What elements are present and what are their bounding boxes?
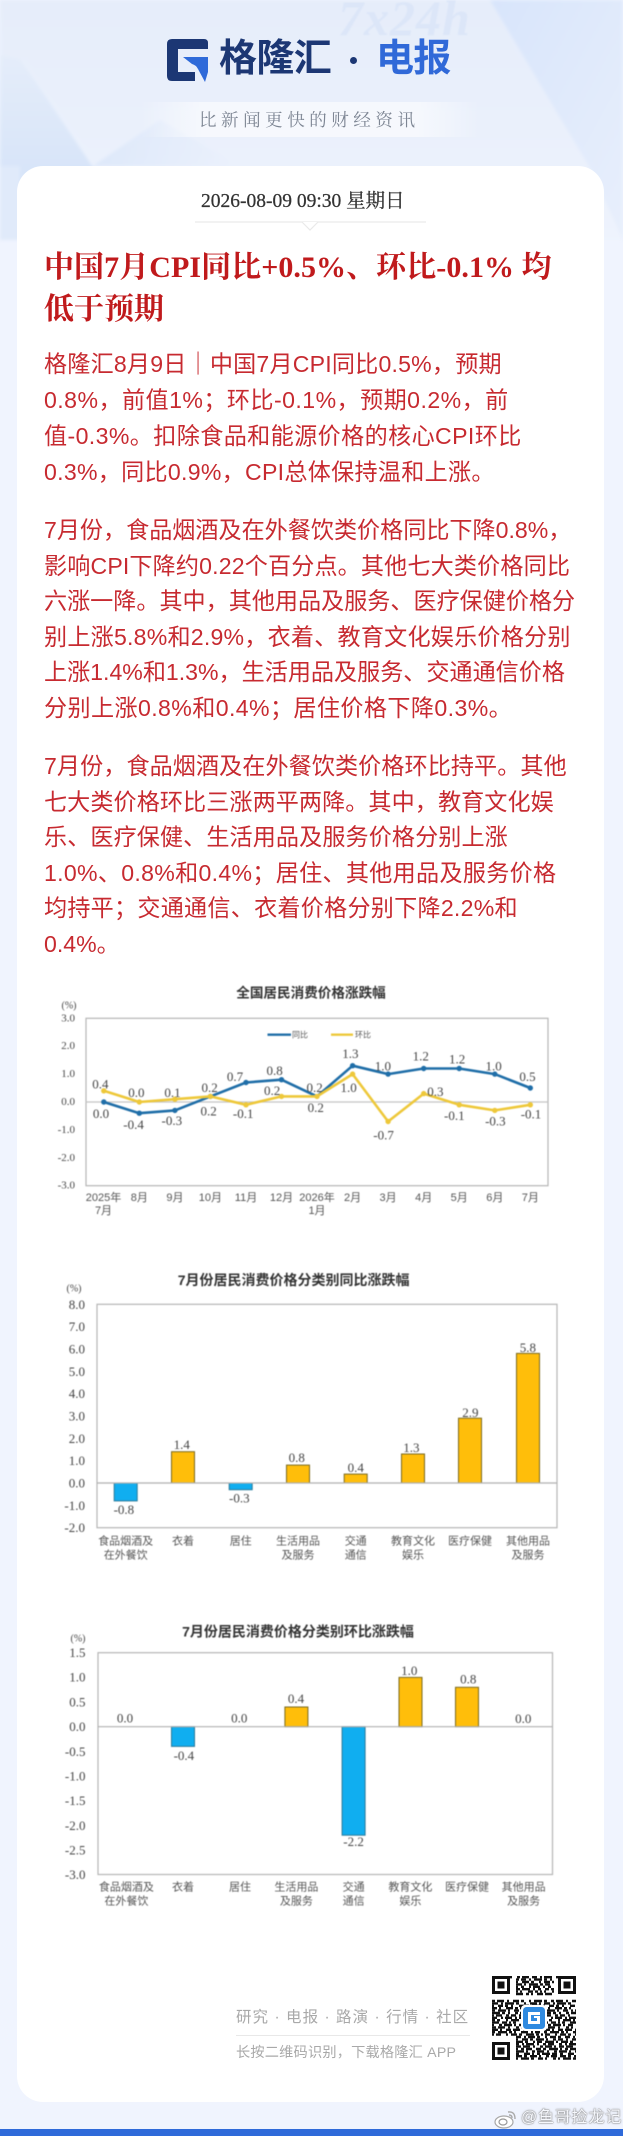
x axis labels: 4月 [415, 1192, 432, 1204]
text block: month on month: 7月份，食品烟酒及在外餐饮类价格环比持平。其他 [44, 753, 567, 779]
data labels: 0.4 [348, 1460, 364, 1475]
text block: year on year: 7月份，食品烟酒及在外餐饮类价格同比下降0.8%， [44, 517, 571, 543]
legend: 同比 [292, 1030, 308, 1040]
data labels: year on year [93, 1046, 536, 1132]
x axis labels: 2月 [344, 1192, 361, 1204]
tagline: 比新闻更快的财经资讯 [199, 110, 420, 130]
category labels: 娱乐 [402, 1547, 424, 1561]
series: year on year [101, 1063, 533, 1116]
category labels: 食品烟酒及 [99, 1879, 154, 1893]
category labels: 教育文化 [391, 1534, 435, 1548]
y axis labels: 2.0 [69, 1431, 85, 1446]
y axis labels: 1.5 [69, 1645, 86, 1660]
category labels: 在外餐饮 [104, 1547, 148, 1561]
x axis labels: 7月 [95, 1205, 112, 1217]
bar chart: month on month by category [64, 1623, 554, 1907]
chart title: 7月份居民消费价格分类别同比涨跌幅 [178, 1272, 409, 1288]
category labels: 生活用品 [274, 1879, 318, 1893]
series: month on month [101, 1071, 533, 1124]
data labels: year on year: -0.4 [123, 1117, 144, 1132]
category labels: 居住 [230, 1534, 252, 1548]
data labels: month on month: 0.2 [308, 1100, 324, 1115]
icon: G mark [167, 39, 208, 82]
footer note: 长按二维码识别，下载格隆汇 APP [236, 2045, 456, 2061]
legend: 环比 [355, 1030, 371, 1040]
category labels: 交通 [343, 1879, 365, 1893]
data labels: year on year: 1.3 [342, 1046, 359, 1061]
y axis labels: -2.0 [64, 1520, 85, 1535]
y axis labels: 8.0 [69, 1297, 85, 1312]
y axis labels: -2.0 [65, 1818, 86, 1833]
data labels: year on year: 0.5 [519, 1069, 536, 1084]
text block: month on month: 乐、医疗保健、生活用品及服务价格分别上涨 [44, 824, 508, 850]
category labels [98, 1534, 550, 1561]
data labels: month on month: -0.7 [373, 1128, 394, 1142]
category labels: 衣着 [172, 1879, 194, 1893]
y axis labels: 1.0 [69, 1453, 85, 1468]
data labels: month on month: 0.1 [164, 1085, 181, 1100]
bar chart: month on month by category: (%) [70, 1634, 86, 1644]
bottom blue bar [0, 2129, 623, 2136]
footer links: 研究 · 电报 · 路演 · 行情 · 社区 [236, 2009, 469, 2026]
category labels: 医疗保健 [445, 1879, 489, 1893]
data labels: -2.2 [343, 1834, 364, 1849]
text block: year on year: 别上涨5.8%和2.9%，衣着、教育文化娱乐价格分别 [44, 624, 571, 650]
category labels: 通信 [343, 1894, 365, 1907]
data labels: year on year: 0.8 [266, 1063, 283, 1078]
watermark: weibo [494, 2108, 622, 2129]
data labels: 0.0 [231, 1710, 247, 1726]
y axis labels: 3.0 [69, 1408, 85, 1424]
text block: summary: 值-0.3%。扣除食品和能源价格的核心CPI环比 [44, 423, 522, 449]
y axis labels: 1.0 [69, 1670, 86, 1684]
y axis labels: -3.0 [58, 1180, 75, 1192]
logo text: 格隆汇: 格隆汇 [219, 38, 331, 80]
text block: summary: 格隆汇8月9日｜中国7月CPI同比0.5%，预期 [44, 351, 502, 377]
bars [172, 1677, 478, 1835]
data labels: month on month: -0.1 [444, 1108, 465, 1123]
data labels: month on month: -0.3 [485, 1114, 506, 1128]
y axis labels: 0.0 [69, 1476, 85, 1490]
category labels: 及服务 [282, 1548, 314, 1561]
watermark text: @鱼哥捡龙记 [521, 2109, 622, 2126]
category labels: 及服务 [280, 1894, 313, 1907]
y axis labels: 0.0 [69, 1719, 86, 1734]
x axis labels: 8月 [131, 1192, 148, 1204]
x axis labels: 1月 [308, 1205, 326, 1217]
category labels: 生活用品 [276, 1534, 320, 1548]
data labels: 1.0 [401, 1663, 417, 1678]
date divider with pointer [195, 222, 426, 230]
logo dot [350, 57, 357, 64]
data labels: year on year: 0.2 [200, 1104, 217, 1118]
data labels: month on month: 0.2 [264, 1083, 280, 1098]
y axis labels: 5.0 [69, 1364, 85, 1379]
title [44, 251, 552, 326]
line chart: national CPI change: (%) [62, 1000, 76, 1012]
x axis labels: 9月 [166, 1192, 183, 1204]
text block: year on year: 上涨1.4%和1.3%，生活用品及服务、交通通信价格 [44, 659, 565, 685]
y axis labels: 6.0 [69, 1342, 85, 1356]
data labels: month on month: 1.0 [340, 1080, 357, 1095]
category labels: 在外餐饮 [104, 1893, 148, 1907]
y axis labels: 0.5 [69, 1694, 86, 1710]
data labels: 0.0 [117, 1710, 133, 1726]
x axis labels: 2026年 [299, 1190, 335, 1204]
text block: month on month [44, 753, 567, 956]
data labels: 0.4 [288, 1691, 305, 1706]
y axis labels: -1.0 [58, 1124, 75, 1136]
category labels [99, 1879, 546, 1907]
x axis labels [86, 1190, 539, 1217]
y axis labels: 3.0 [61, 1012, 76, 1024]
y axis labels: 1.0 [61, 1068, 76, 1080]
text block: summary: 0.8%，前值1%；环比-0.1%，预期0.2%，前 [44, 387, 509, 413]
y axis labels [58, 1012, 76, 1192]
data labels: year on year: 1.0 [375, 1058, 391, 1074]
category labels: 其他用品 [502, 1880, 546, 1893]
data labels: year on year: -0.3 [162, 1113, 182, 1128]
data labels: 5.8 [520, 1340, 536, 1355]
y axis labels: -2.0 [58, 1152, 75, 1164]
y axis labels [64, 1297, 85, 1535]
data labels [114, 1340, 536, 1517]
line chart: national CPI change [58, 984, 550, 1217]
bars [114, 1353, 539, 1501]
title: 低于预期 [44, 293, 164, 326]
text block: summary [44, 351, 522, 485]
y axis labels: 0.0 [61, 1096, 76, 1108]
data labels: month on month: 0.4 [92, 1076, 109, 1092]
x axis labels: 7月 [522, 1192, 539, 1204]
category labels: 及服务 [512, 1548, 544, 1561]
data labels: year on year: 0.2 [306, 1080, 323, 1095]
data labels: month on month: 0.2 [201, 1080, 218, 1095]
data labels: 1.4 [174, 1437, 190, 1452]
x axis labels: 3月 [380, 1192, 397, 1204]
text block: year on year: 影响CPI下降约0.22个百分点。其他七大类价格同比 [44, 552, 570, 578]
icon: QR code [492, 1976, 576, 2060]
legend [268, 1030, 371, 1040]
y axis labels: -2.5 [65, 1842, 86, 1858]
text block: year on year [44, 517, 575, 720]
data labels: 0.8 [460, 1672, 476, 1686]
bar chart: year on year by category [64, 1272, 558, 1561]
text block: month on month: 均持平；交通通信、衣着价格分别下降2.2%和 [44, 895, 518, 921]
y axis labels: 2.0 [61, 1040, 76, 1052]
data labels: 0.0 [515, 1711, 531, 1726]
tagline band [140, 102, 480, 137]
y axis labels: 7.0 [69, 1319, 85, 1334]
text block: summary: 0.3%，同比0.9%，CPI总体保持温和上涨。 [44, 459, 495, 485]
data labels: -0.3 [229, 1490, 250, 1506]
category labels: 交通 [345, 1534, 367, 1548]
data labels [117, 1663, 531, 1849]
y axis labels: -1.0 [65, 1768, 86, 1784]
data labels: year on year: 0.0 [93, 1106, 109, 1121]
x axis labels: 11月 [235, 1192, 257, 1204]
header background [0, 0, 623, 240]
data labels: month on month: -0.1 [233, 1106, 253, 1121]
x axis labels: 10月 [199, 1192, 222, 1204]
text block: year on year: 六涨一降。其中，其他用品及服务、医疗保健价格分 [44, 588, 575, 614]
y axis labels: -1.5 [65, 1793, 86, 1808]
x axis labels: 12月 [270, 1192, 293, 1204]
y axis labels: 4.0 [69, 1386, 85, 1401]
logo text: 电报: 电报 [376, 38, 451, 80]
data labels: -0.4 [174, 1748, 195, 1763]
y axis labels: -3.0 [65, 1867, 86, 1882]
category labels: 衣着 [172, 1534, 194, 1548]
data labels: month on month: 0.0 [128, 1085, 145, 1100]
category labels: 医疗保健 [448, 1534, 492, 1548]
footer divider [236, 2035, 470, 2036]
text block: month on month: 0.4%。 [44, 930, 120, 956]
y axis labels [65, 1645, 86, 1882]
data labels: year on year: 1.0 [485, 1058, 502, 1074]
x axis labels: 6月 [486, 1192, 503, 1204]
chart title: 全国居民消费价格涨跌幅 [236, 984, 386, 1000]
category labels: 通信 [345, 1548, 367, 1561]
category labels: 食品烟酒及 [98, 1534, 153, 1548]
logo: 格隆汇 电报 [167, 38, 451, 82]
data labels: month on month [92, 1076, 541, 1142]
data labels: month on month: 0.3 [427, 1084, 444, 1099]
category labels: 及服务 [507, 1894, 540, 1907]
text block: month on month: 1.0%、0.8%和0.4%；居住、其他用品及服务价格 [44, 860, 556, 886]
data labels: year on year: 1.2 [413, 1048, 429, 1064]
category labels: 教育文化 [388, 1879, 432, 1893]
category labels: 其他用品 [506, 1535, 550, 1548]
bar chart: year on year by category: (%) [66, 1284, 82, 1294]
text block: month on month: 七大类价格环比三涨两平两降。其中，教育文化娱 [44, 788, 554, 814]
date: 2026-08-09 09:30 星期日 [201, 191, 405, 212]
x axis labels: 2025年 [86, 1190, 121, 1204]
data labels: 0.8 [289, 1450, 305, 1465]
data labels: year on year: 1.2 [449, 1052, 465, 1066]
icon: weibo [494, 2111, 516, 2129]
data labels: 2.9 [462, 1405, 479, 1420]
y axis labels: -0.5 [65, 1744, 86, 1759]
category labels: 娱乐 [399, 1893, 421, 1907]
y axis labels: -1.0 [64, 1498, 85, 1513]
title: 中国7月CPI同比+0.5%、环比-0.1% 均 [44, 251, 552, 284]
chart title: 7月份居民消费价格分类别环比涨跌幅 [182, 1624, 414, 1640]
data labels: -0.8 [114, 1502, 134, 1517]
data labels: month on month: -0.1 [521, 1106, 541, 1122]
data labels: 1.3 [403, 1440, 420, 1455]
x axis labels: 5月 [451, 1192, 468, 1204]
category labels: 居住 [229, 1879, 251, 1893]
text block: year on year: 分别上涨0.8%和0.4%；居住价格下降0.3%。 [44, 694, 512, 720]
data labels: year on year: 0.7 [227, 1069, 244, 1084]
